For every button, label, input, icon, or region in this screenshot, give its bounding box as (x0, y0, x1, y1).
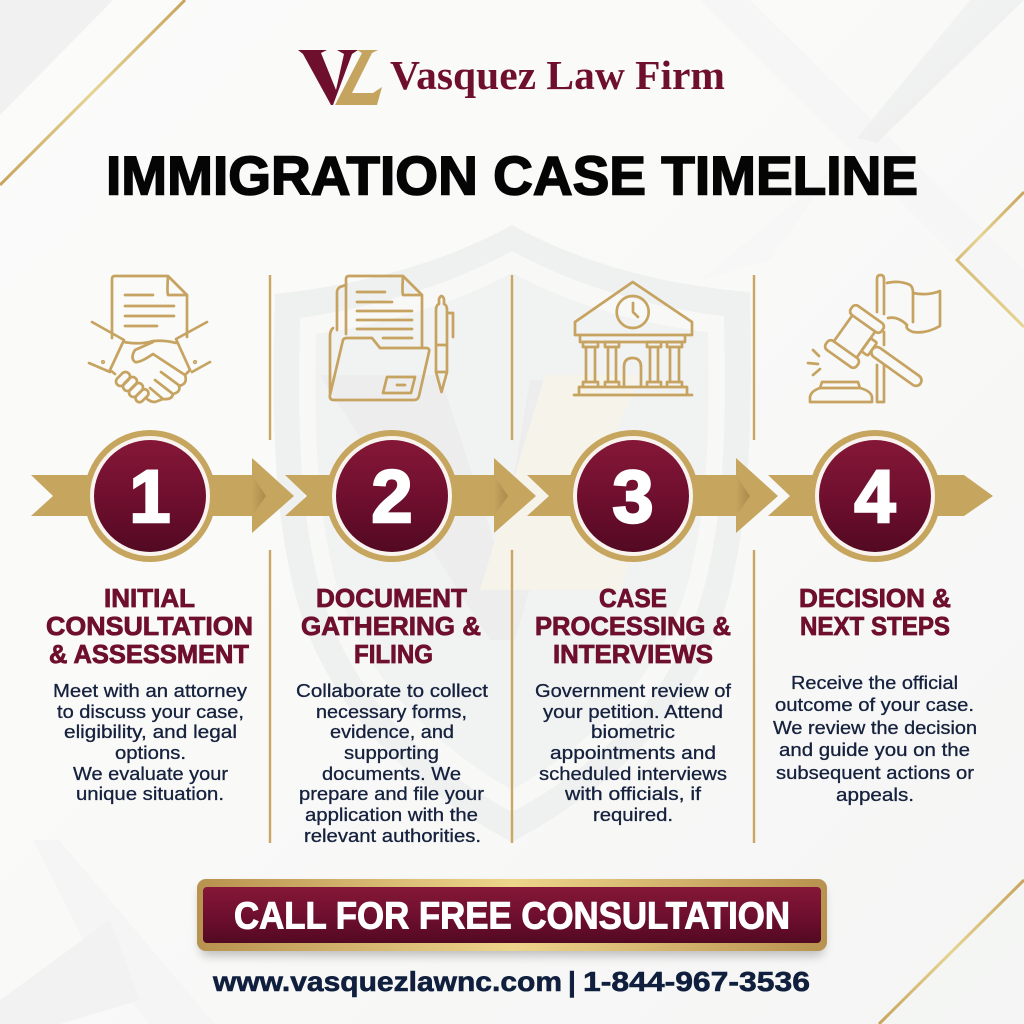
body text: and guide you on the (779, 739, 970, 760)
firm name: Vasquez Law Firm (390, 52, 725, 98)
body text: with officials, if (564, 783, 702, 804)
panel: step 1 (46, 276, 253, 804)
body text: unique situation. (76, 783, 224, 804)
body text: subsequent actions or (776, 762, 974, 783)
heading: DECISION & (799, 583, 951, 613)
body text: to discuss your case, (57, 701, 244, 722)
body text: outcome of your case. (775, 694, 974, 715)
body text: documents. We (322, 763, 461, 784)
heading: INTERVIEWS (553, 639, 713, 669)
body text: your petition. Attend (543, 701, 723, 722)
heading (535, 583, 731, 669)
number badge 4 (809, 430, 941, 562)
body text (296, 680, 488, 846)
logo mark: VL monogram (298, 50, 382, 105)
call to action button (197, 879, 827, 956)
number badge 1: 1 (129, 455, 171, 538)
number badge 3 (567, 430, 699, 562)
number badge 3: 3 (612, 455, 654, 538)
call to action button: CALL FOR FREE CONSULTATION (234, 896, 790, 938)
body text: required. (593, 804, 673, 825)
body text: biometric (591, 721, 675, 742)
heading: INITIAL (104, 583, 195, 613)
icon: folder, document and pen (330, 276, 453, 400)
body text: We review the decision (773, 717, 977, 738)
body text: prepare and file your (299, 783, 484, 804)
icon: government building with clock (574, 282, 692, 395)
heading (46, 583, 253, 669)
body text: relevant authorities. (304, 825, 481, 846)
body text: Collaborate to collect (296, 680, 488, 701)
number badge 1 (84, 430, 216, 562)
body text (535, 680, 732, 825)
heading: DOCUMENT (316, 583, 467, 613)
body text: We evaluate your (73, 763, 228, 784)
watermark shield (274, 225, 751, 842)
body text (773, 672, 977, 805)
timeline arrow band (31, 458, 993, 533)
heading (799, 583, 951, 641)
number badge 2 (326, 430, 458, 562)
body text: Government review of (535, 680, 732, 701)
logo (298, 50, 725, 105)
contact line: www.vasquezlawnc.com (212, 966, 562, 997)
heading: NEXT STEPS (800, 611, 950, 641)
panel: step 3 (535, 282, 732, 825)
body text: Receive the official (791, 672, 958, 693)
contact line (212, 966, 810, 997)
heading: CASE (599, 583, 667, 613)
body text: necessary forms, (316, 701, 467, 722)
panel: step 4 (773, 275, 977, 805)
body text: appointments and (550, 742, 716, 763)
body text: evidence, and (330, 721, 454, 742)
panel: step 2 (296, 276, 488, 846)
heading (301, 583, 481, 669)
contact line: | (568, 966, 576, 997)
number badge 4: 4 (854, 455, 896, 538)
heading: GATHERING & (301, 611, 481, 641)
heading: & ASSESSMENT (49, 639, 249, 669)
body text: Meet with an attorney (53, 680, 248, 701)
heading: FILING (354, 639, 433, 669)
body text: application with the (305, 804, 478, 825)
heading: CONSULTATION (46, 611, 253, 641)
contact line: 1-844-967-3536 (583, 966, 810, 997)
body text: scheduled interviews (539, 763, 727, 784)
body text: appeals. (836, 784, 914, 805)
body text: eligibility, and legal (64, 721, 237, 742)
icon: gavel and flag (808, 275, 940, 406)
icon: document and handshake (89, 276, 210, 404)
body text: options. (115, 742, 186, 763)
number badge 2: 2 (371, 455, 413, 538)
body text (53, 680, 248, 804)
heading: PROCESSING & (535, 611, 731, 641)
title: IMMIGRATION CASE TIMELINE (106, 144, 918, 206)
body text: supporting (344, 742, 439, 763)
column dividers (270, 275, 754, 843)
